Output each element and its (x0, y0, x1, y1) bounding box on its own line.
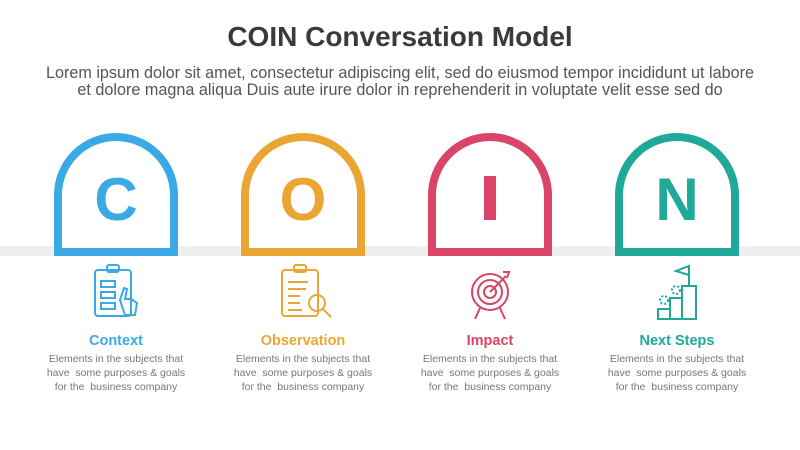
column: Context (47, 333, 185, 393)
title: COIN Conversation Model (227, 21, 573, 52)
column: Observation: have some purposes & goals (234, 367, 372, 379)
column: Next Steps (608, 333, 746, 393)
subtitle: Lorem ipsum dolor sit amet, consectetur adipiscing elit, sed do eiusmod tempor incididunt ut labore (46, 64, 754, 82)
column: Next Steps: Next Steps (640, 333, 714, 349)
subtitle (46, 64, 754, 99)
column: Context: Elements in the subjects that (49, 353, 183, 365)
arch I (432, 137, 548, 252)
column: Observation: Observation (261, 333, 345, 349)
icon: clipboard hand (95, 265, 137, 316)
column: Impact: Elements in the subjects that (423, 353, 557, 365)
icon: steps flag (658, 266, 696, 319)
arch O (245, 137, 361, 252)
column: Next Steps: for the business company (616, 381, 738, 393)
icon: target (472, 272, 509, 319)
column: Impact: Impact (467, 333, 513, 349)
arch O: O (280, 166, 326, 233)
subtitle: et dolore magna aliqua Duis aute irure dolor in reprehenderit in voluptate velit esse sed do (77, 81, 723, 99)
column: Observation: Elements in the subjects that (236, 353, 370, 365)
column: Context: Context (89, 333, 143, 349)
column: Impact (421, 333, 559, 393)
arch C (58, 137, 174, 252)
column: Observation: for the business company (242, 381, 364, 393)
column: Impact: for the business company (429, 381, 551, 393)
column: Observation (234, 333, 372, 393)
column: Next Steps: have some purposes & goals (608, 367, 746, 379)
arch N (619, 137, 735, 252)
icon: clipboard magnifier (282, 265, 331, 317)
column: Context: have some purposes & goals (47, 367, 185, 379)
column: Next Steps: Elements in the subjects that (610, 353, 744, 365)
column: Context: for the business company (55, 381, 177, 393)
column: Impact: have some purposes & goals (421, 367, 559, 379)
arch N: N (655, 166, 699, 233)
arch C: C (94, 166, 138, 233)
